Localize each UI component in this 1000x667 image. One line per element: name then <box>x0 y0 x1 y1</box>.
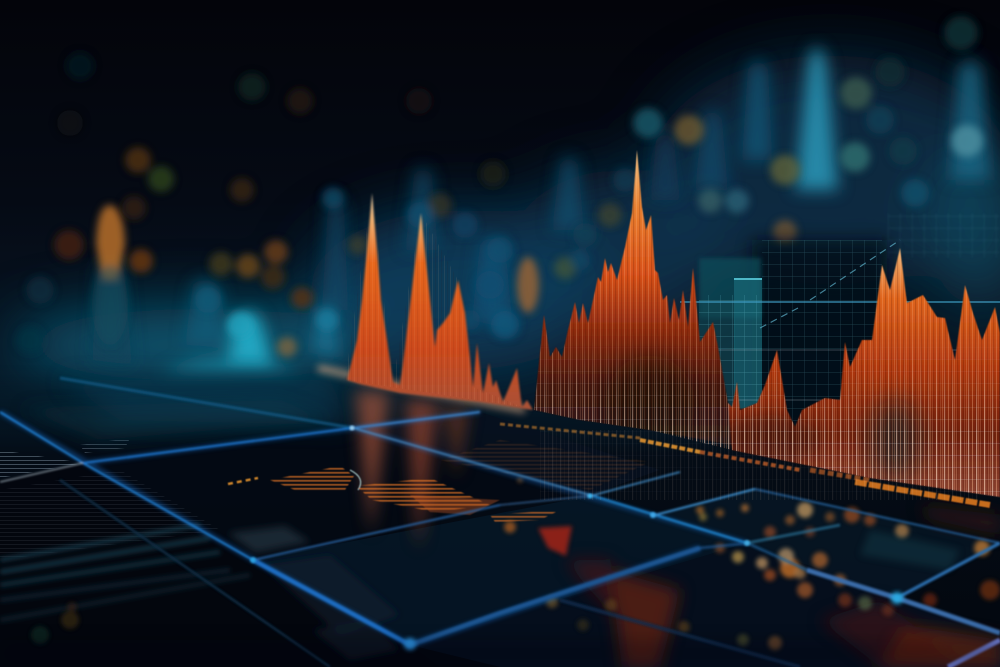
grid lines on floor <box>0 378 1000 667</box>
blurred keypad blocks on floor <box>228 526 400 660</box>
blue teal patch over bokeh floor <box>860 530 960 570</box>
floor surface <box>0 365 1000 667</box>
peak group: left spikes <box>347 193 533 410</box>
blurred orange bokeh on floor <box>31 478 1000 650</box>
red reflection spot <box>538 526 572 556</box>
dark zone behind chart grid <box>752 240 887 430</box>
pale lines descending past baseline <box>540 430 980 500</box>
bottom shadow <box>0 640 1000 667</box>
orange chart peaks <box>318 150 1000 500</box>
peak group: central and right ranges <box>534 150 1000 497</box>
floor panels <box>0 380 1000 667</box>
baseline glow behind left peaks <box>318 368 525 410</box>
orange peak reflections on floor <box>355 390 1000 667</box>
dark shaded patches inside peaks <box>534 150 1000 500</box>
glowing data marks on floor <box>228 424 990 522</box>
blurred floor stripes, lower left <box>0 525 250 620</box>
bokeh lights <box>16 16 983 357</box>
blurred orange tower, left <box>92 205 539 345</box>
blurred blue towers <box>92 48 990 372</box>
blue ambient glow <box>10 55 1000 381</box>
chart grid panel, background right <box>680 213 1000 430</box>
